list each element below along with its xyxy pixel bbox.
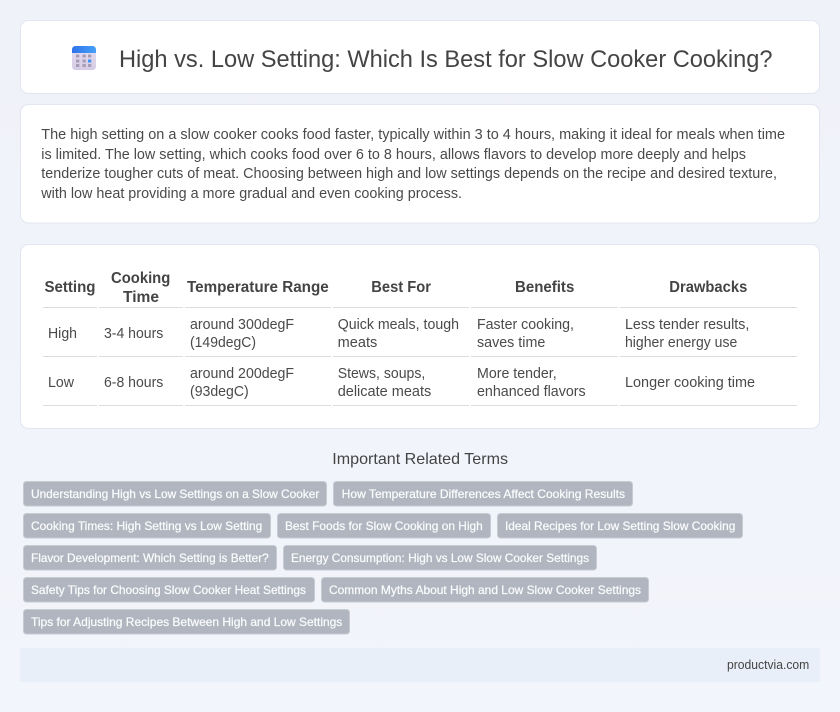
tag: safety tips <box>24 578 314 602</box>
tag: temperature differences <box>334 482 632 506</box>
table row: High: around 300degF <box>190 317 294 333</box>
tag: safety tips: Safety Tips for Choosing Slow Cooker Heat Settings <box>31 583 306 597</box>
tag: common myths: Common Myths About High and Low Slow Cooker Settings <box>329 583 641 597</box>
table row: Low: 6-8 hours <box>104 375 163 391</box>
tag: adjusting recipes: Tips for Adjusting Recipes Between High and Low Settings <box>31 615 342 629</box>
table row: Low <box>43 366 797 406</box>
heading: important related terms: Important Related Terms <box>332 451 508 468</box>
tag: adjusting recipes <box>24 610 350 634</box>
tag: understanding settings <box>24 482 326 506</box>
table row: Low: Longer cooking time <box>625 375 755 391</box>
title: High vs. Low Setting: Which Is Best for Slow Cooker Cooking? <box>119 46 772 73</box>
table row: Low: More tender, <box>477 366 557 382</box>
tag: best foods <box>278 514 490 538</box>
footer bar <box>20 648 820 682</box>
table row: High: (149degC) <box>190 335 256 351</box>
panel: related term tags <box>24 482 742 634</box>
tag: energy consumption <box>284 546 596 570</box>
tag: common myths <box>322 578 648 602</box>
panel: intro text <box>20 104 820 223</box>
table row: Low: delicate meats <box>338 384 431 400</box>
tag: cooking times: Cooking Times: High Setting vs Low Setting <box>31 519 262 533</box>
intro paragraph: is limited. The low setting, which cooks food over 6 to 8 hours, allows flavors to develop more deeply and helps <box>41 146 746 163</box>
table header row: Temperature Range <box>187 279 329 296</box>
intro paragraph: tenderize tougher cuts of meat. Choosing between high and low settings depends on the recipe and desired texture, <box>41 165 777 182</box>
tag: best foods: Best Foods for Slow Cooking on High <box>285 519 483 533</box>
tag: energy consumption: Energy Consumption: High vs Low Slow Cooker Settings <box>291 551 589 565</box>
icon: calendar <box>72 46 96 70</box>
tag: flavor development: Flavor Development: Which Setting is Better? <box>31 551 269 565</box>
tag: cooking times <box>24 514 270 538</box>
tag: understanding settings: Understanding High vs Low Settings on a Slow Cooker <box>31 487 319 501</box>
table row: High: High <box>48 326 77 342</box>
table row: Low: Stews, soups, <box>338 366 425 382</box>
table row: Low: around 200degF <box>190 366 294 382</box>
intro paragraph <box>40 126 785 202</box>
intro paragraph: with low heat providing a more gradual and even cooking process. <box>40 185 462 202</box>
panel: comparison table <box>20 244 820 428</box>
table row: High: saves time <box>477 335 545 351</box>
table row: High: Less tender results, <box>625 317 749 333</box>
table header row: Time <box>123 289 159 306</box>
table row: Low: (93degC) <box>190 384 249 400</box>
table header row: Setting <box>44 279 96 296</box>
tag: ideal recipes <box>498 514 742 538</box>
table header row: Benefits <box>515 279 574 296</box>
table row: High <box>43 317 797 357</box>
table row: Low: enhanced flavors <box>477 384 586 400</box>
tag: ideal recipes: Ideal Recipes for Low Setting Slow Cooking <box>505 519 735 533</box>
table header row: Drawbacks <box>669 279 747 296</box>
intro paragraph: The high setting on a slow cooker cooks food faster, typically within 3 to 4 hours, making it ideal for meals when time <box>41 126 785 143</box>
tag: temperature differences: How Temperature Differences Affect Cooking Results <box>342 487 625 501</box>
panel: title header <box>20 20 820 94</box>
table row: High: meats <box>338 335 377 351</box>
table row: High: 3-4 hours <box>104 326 163 342</box>
table header row: Best For <box>371 279 431 296</box>
table row: High: Faster cooking, <box>477 317 574 333</box>
table row: High: higher energy use <box>625 335 737 351</box>
footer source text: productvia.com <box>727 657 809 672</box>
table header row <box>43 270 797 308</box>
table row: High: Quick meals, tough <box>338 317 459 333</box>
table row: Low: Low <box>48 375 75 391</box>
tag: flavor development <box>24 546 276 570</box>
table header row: Cooking <box>111 270 170 287</box>
